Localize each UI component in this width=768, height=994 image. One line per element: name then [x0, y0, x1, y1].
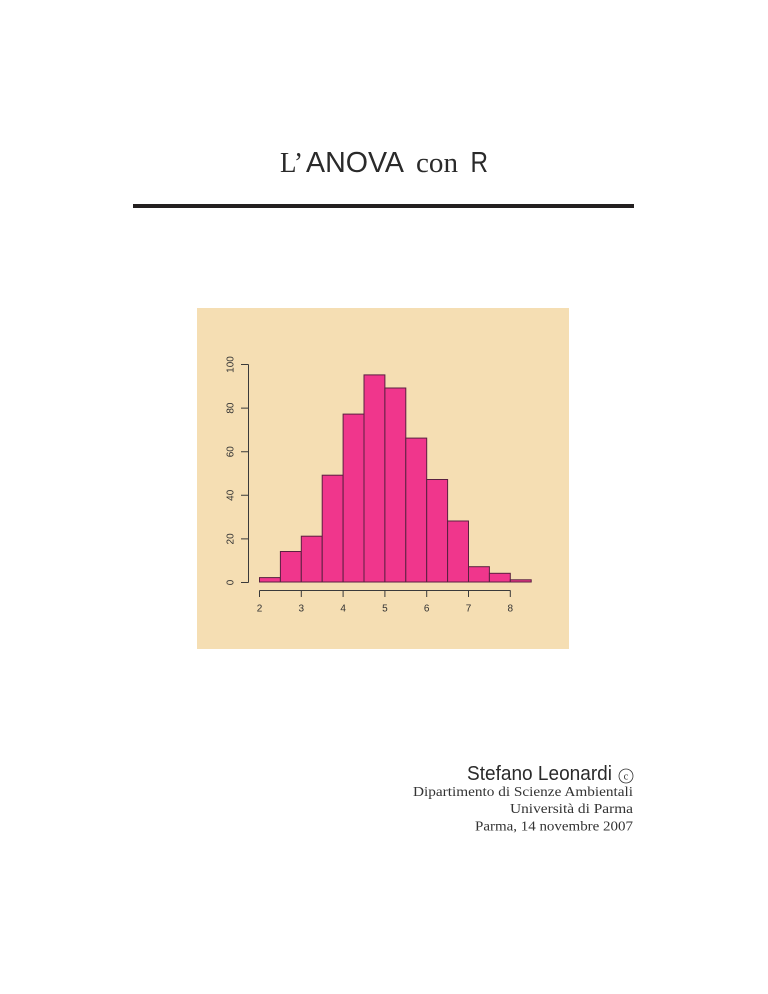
y axis labels: 80 [226, 402, 236, 414]
y axis labels: 60 [226, 446, 236, 457]
x axis labels [257, 604, 514, 614]
x axis labels: 4 [340, 604, 346, 614]
title: con [416, 148, 458, 179]
y axis labels: 20 [226, 533, 236, 544]
affiliation text: Parma, 14 novembre 2007 [475, 818, 633, 834]
title: R [470, 146, 488, 178]
panel background [197, 308, 569, 649]
x axis labels: 6 [424, 604, 430, 614]
y axis labels: 0 [226, 579, 236, 585]
affiliation text: Università di Parma [510, 801, 633, 816]
title: L’ [280, 148, 303, 179]
affiliation text: Dipartimento di Scienze Ambientali [413, 784, 633, 799]
x axis labels: 5 [382, 604, 388, 614]
title rule [133, 204, 634, 208]
y axis labels: 100 [226, 356, 236, 373]
x axis labels: 2 [257, 604, 263, 614]
y axis labels: 40 [226, 489, 236, 501]
affiliation text [413, 784, 633, 834]
x axis labels: 3 [299, 604, 305, 614]
icon: copyright [619, 769, 633, 783]
y axis labels [226, 356, 236, 585]
title [280, 146, 488, 179]
title: ANOVA [306, 147, 404, 179]
x axis labels: 8 [508, 604, 514, 614]
icon: copyright: c [624, 772, 629, 782]
x axis labels: 7 [466, 604, 472, 614]
bar chart [260, 375, 531, 582]
y axis [241, 364, 248, 582]
author name: Stefano Leonardi [467, 763, 612, 785]
x axis [260, 590, 510, 597]
panel: histogram [197, 308, 569, 649]
